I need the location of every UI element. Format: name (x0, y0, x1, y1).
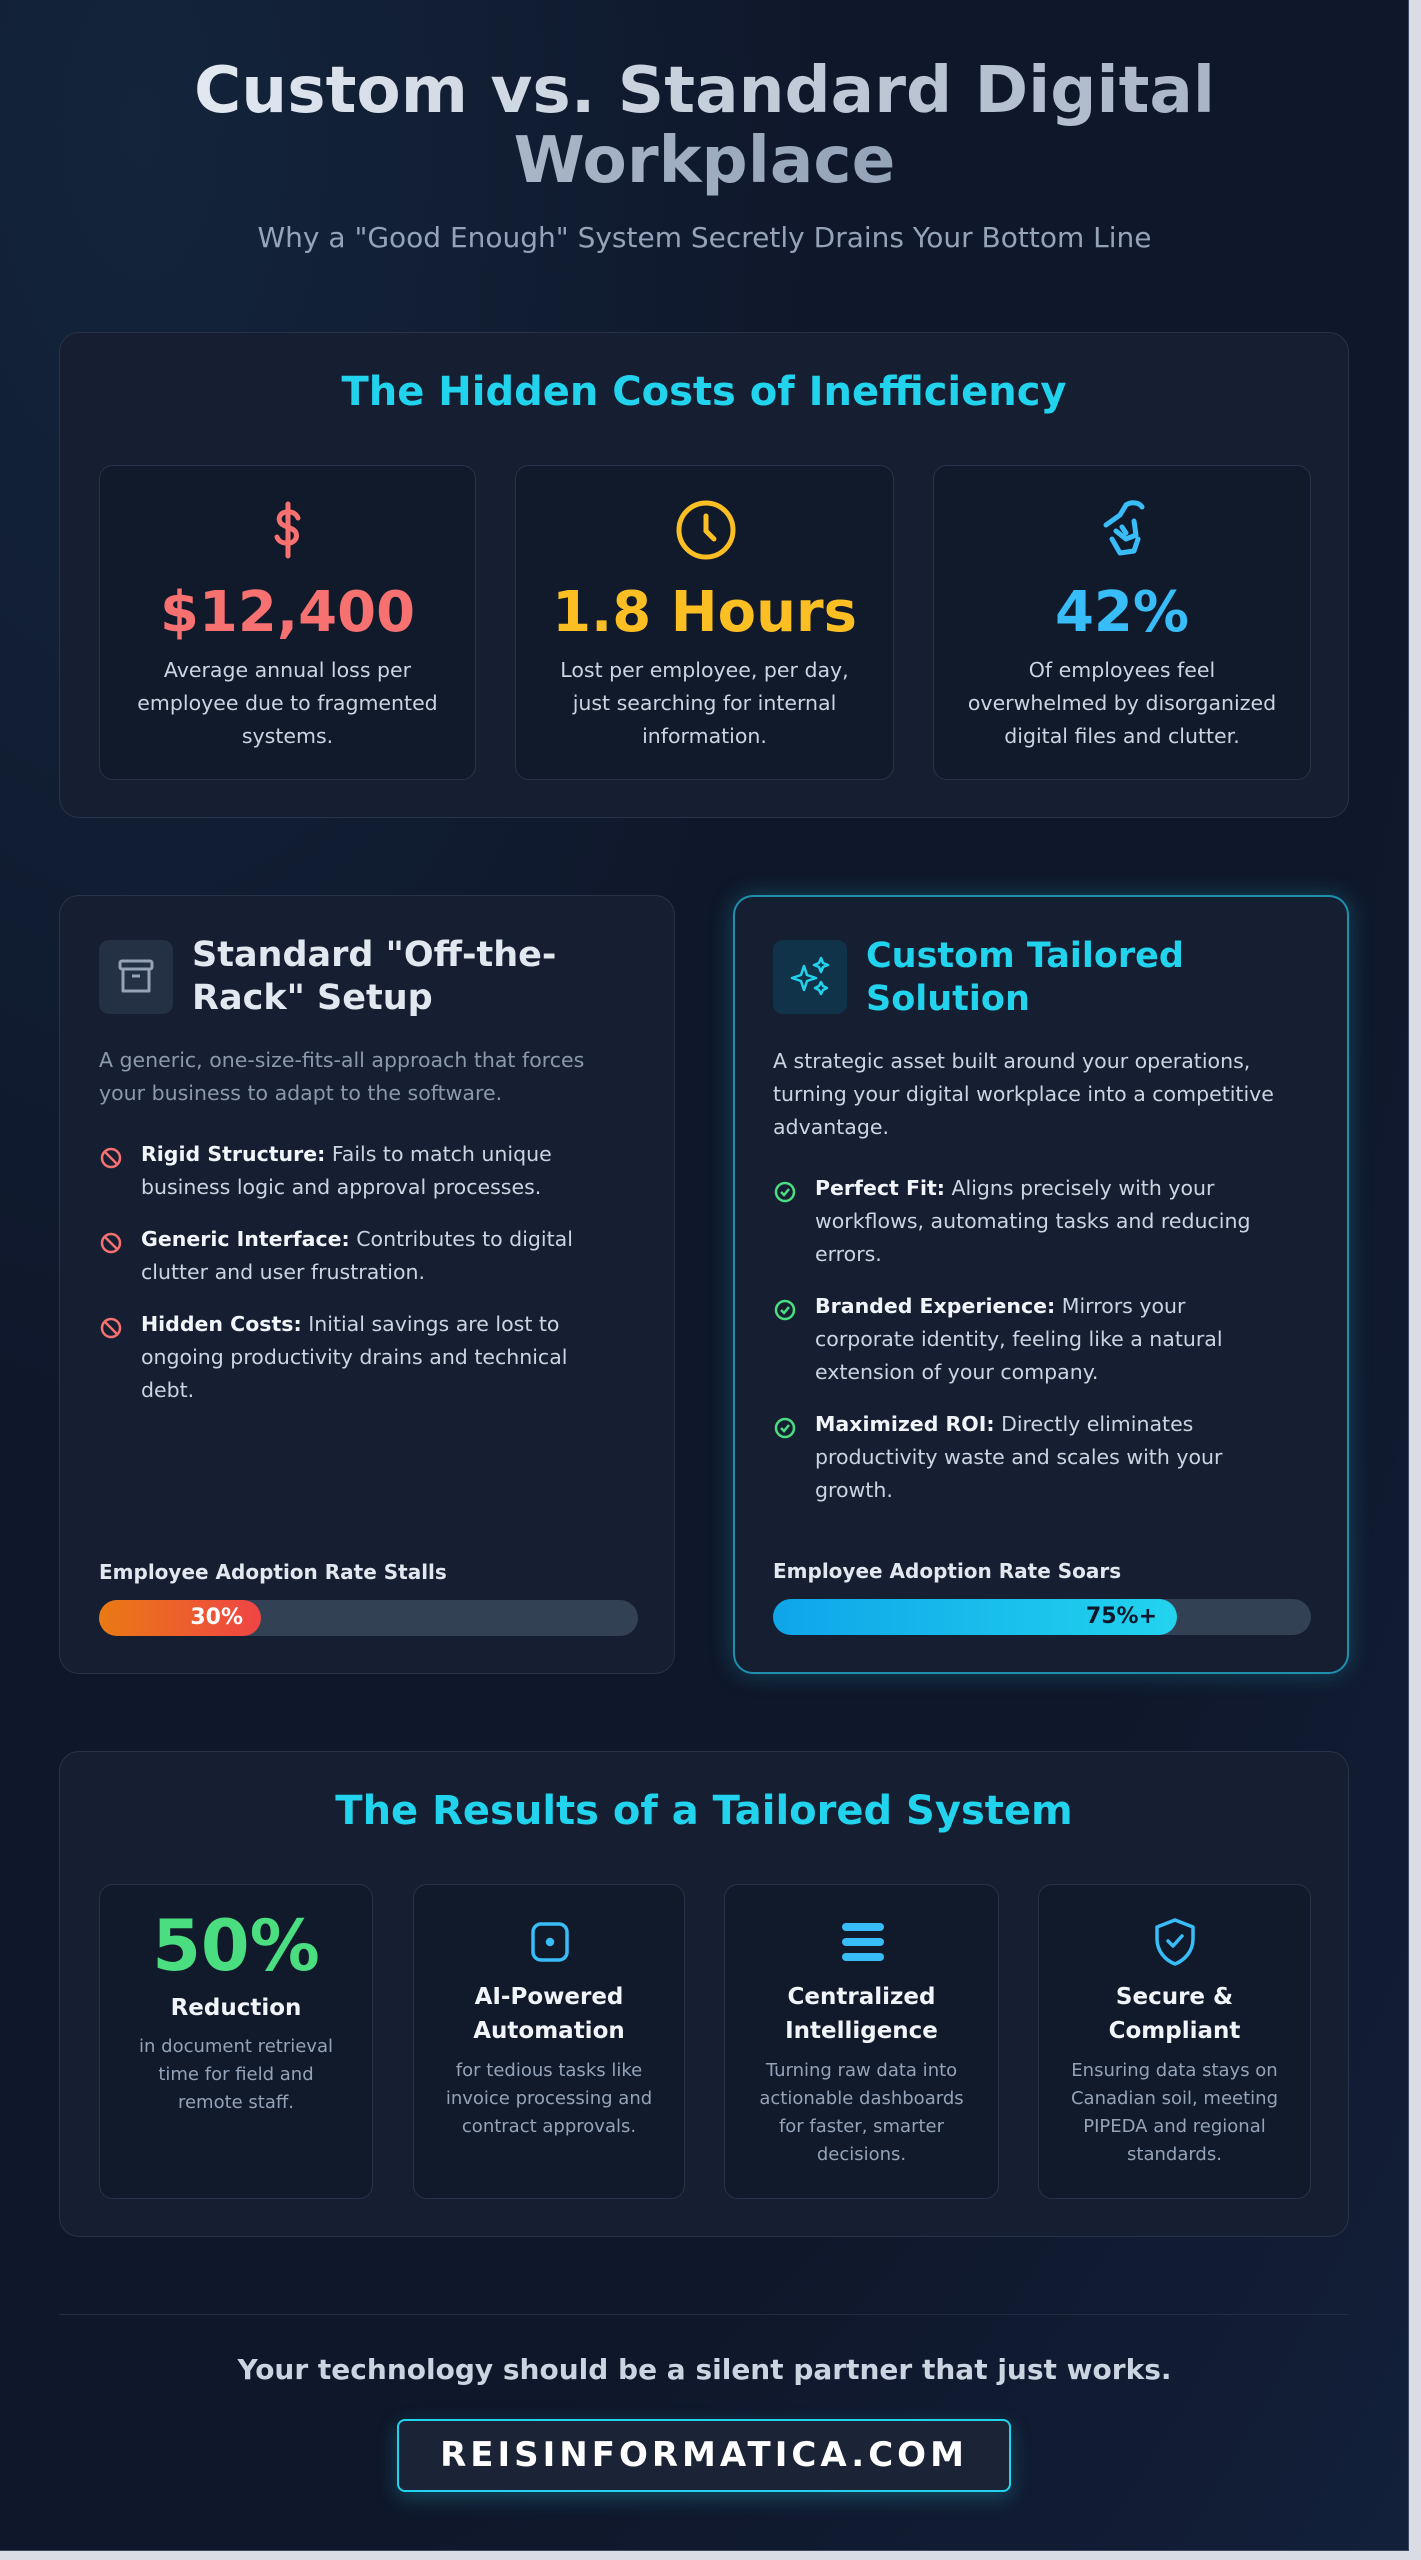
icon: shield (1155, 1918, 1195, 1966)
icon: clock (676, 500, 736, 560)
big number: 50% (152, 1905, 320, 1987)
panel: standard setup (59, 895, 675, 1674)
bar: 75%: 75%+ (1086, 1604, 1157, 1629)
list: benefits (774, 1176, 1250, 1502)
stat description: Lost per employee, per day, just searching for internal information. (560, 658, 849, 748)
title: Compliant (1109, 2018, 1240, 2044)
heading: standard (192, 935, 556, 1018)
item: perfect fit: Perfect Fit: Aligns precisely with your workflows, automating tasks and reducing errors. (815, 1176, 1250, 1266)
panel: results (59, 1751, 1349, 2237)
bar: 30% (99, 1600, 638, 1636)
stat card: cost (99, 465, 476, 780)
stat number: 42% (1055, 580, 1189, 645)
title (194, 53, 1215, 198)
desc: Ensuring data stays on Canadian soil, meeting PIPEDA and regional standards. (1071, 2060, 1278, 2165)
panel: custom solution (733, 895, 1349, 1674)
icon: dollar (274, 502, 300, 558)
heading: hidden costs: The Hidden Costs of Inefficiency (341, 369, 1067, 415)
list: drawbacks (100, 1142, 573, 1402)
heading: custom: Solution (866, 979, 1030, 1019)
title (1109, 1984, 1240, 2044)
result card: automation (413, 1884, 685, 2199)
subtitle: Why a "Good Enough" System Secretly Drains Your Bottom Line (257, 221, 1152, 254)
heading: custom: Custom Tailored (866, 936, 1184, 976)
title: Secure & (1116, 1984, 1233, 2010)
title: Centralized (788, 1984, 935, 2010)
stat card: overwhelmed (933, 465, 1311, 780)
bar: 75% (773, 1599, 1311, 1635)
item: generic: Generic Interface: Contributes to digital clutter and user frustration. (141, 1227, 573, 1284)
stat number: 1.8 Hours (552, 580, 857, 645)
icon: chip (531, 1922, 569, 1962)
bar label: Employee Adoption Rate Stalls (99, 1560, 447, 1584)
stat description: Average annual loss per employee due to fragmented systems. (137, 658, 438, 748)
button: website (397, 2419, 1011, 2492)
title: Automation (473, 2018, 625, 2044)
result card: intelligence (724, 1884, 999, 2199)
heading: results: The Results of a Tailored System (335, 1788, 1073, 1834)
icon: clutter (1104, 500, 1144, 556)
title (785, 1984, 938, 2044)
button: website: REISINFORMATICA.COM (440, 2435, 968, 2475)
result card: 50% (99, 1884, 373, 2199)
heading: standard: Standard "Off-the- (192, 935, 556, 975)
tagline: Your technology should be a silent partner that just works. (237, 2353, 1172, 2386)
stat description: Of employees feel overwhelmed by disorganized digital files and clutter. (968, 658, 1276, 748)
item: roi: Maximized ROI: Directly eliminates productivity waste and scales with your growth. (815, 1412, 1222, 1502)
item: rigid: Rigid Structure: Fails to match unique business logic and approval processes. (141, 1142, 552, 1199)
bar label: Employee Adoption Rate Soars (773, 1559, 1121, 1583)
description: A strategic asset built around your operations, turning your digital workplace into a competitive advantage. (773, 1049, 1274, 1139)
title: Workplace (514, 123, 895, 198)
description: A generic, one-size-fits-all approach that forces your business to adapt to the software. (99, 1048, 584, 1105)
panel: hidden costs (59, 332, 1349, 818)
icon: menu bars (842, 1923, 884, 1961)
desc: Turning raw data into actionable dashboards for faster, smarter decisions. (759, 2060, 964, 2165)
desc: for tedious tasks like invoice processing and contract approvals. (446, 2060, 652, 2137)
desc: in document retrieval time for field and remote staff. (139, 2036, 333, 2113)
stat card: hours (515, 465, 894, 780)
title: Intelligence (785, 2018, 938, 2044)
icon: archive box (99, 940, 173, 1014)
heading: custom (866, 936, 1184, 1019)
item: hidden costs: Hidden Costs: Initial savings are lost to ongoing productivity drains and technical debt. (141, 1312, 567, 1402)
title: Custom vs. Standard Digital (194, 53, 1215, 128)
title: AI-Powered (475, 1984, 623, 2010)
title: Reduction (171, 1995, 301, 2021)
icon: sparkles (773, 940, 847, 1014)
bar: 30%: 30% (190, 1605, 243, 1630)
result card: secure (1038, 1884, 1311, 2199)
item: branded: Branded Experience: Mirrors your corporate identity, feeling like a natural extension of your company. (815, 1294, 1223, 1384)
title (473, 1984, 625, 2044)
heading: standard: Rack" Setup (192, 978, 433, 1018)
stat number: $12,400 (160, 580, 415, 645)
